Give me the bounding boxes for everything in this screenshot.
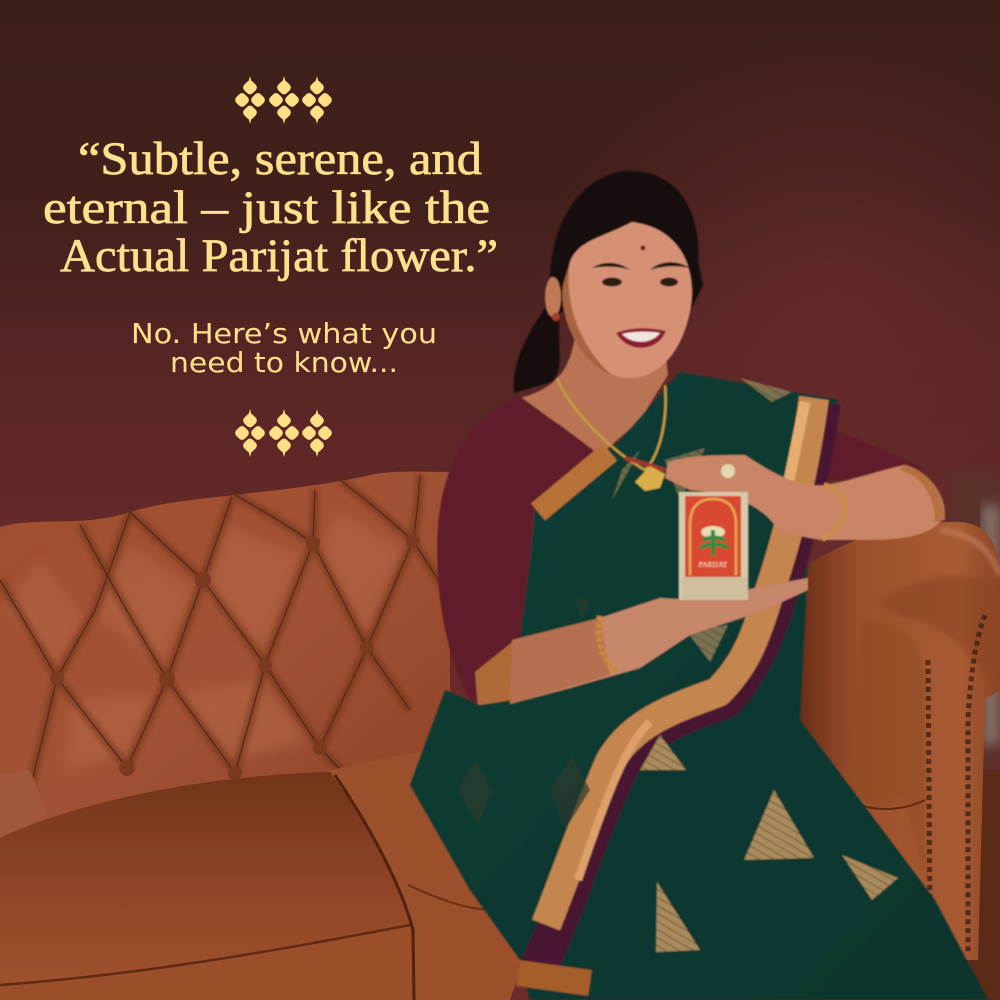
sub text: No. Here’s what you <box>131 317 437 350</box>
saree gold motifs <box>612 378 898 952</box>
quote heading <box>43 133 498 282</box>
tuft highlights <box>5 510 405 770</box>
ring <box>721 464 735 478</box>
leather sofa <box>0 472 1000 1000</box>
sub text: need to know... <box>170 346 398 379</box>
bracelet <box>822 485 845 540</box>
saree gold border <box>518 398 822 983</box>
lower arm and hand <box>510 578 808 704</box>
right sofa arm <box>800 522 1000 960</box>
left seat cushion <box>0 772 414 1000</box>
quote heading: “Subtle, serene, and <box>78 133 482 185</box>
top ornament <box>234 76 333 124</box>
right seat cushion <box>320 752 535 1000</box>
gold bangle <box>599 616 617 673</box>
box label: PARIJAT <box>699 560 728 569</box>
quote heading: Actual Parijat flower.” <box>60 230 498 282</box>
green saree <box>410 372 988 1000</box>
woman in green saree holding product <box>410 171 988 1000</box>
studs <box>928 615 985 955</box>
product box <box>679 492 748 600</box>
box flower <box>700 526 728 556</box>
tuft shadow <box>0 475 445 790</box>
sofa back with tufting <box>0 472 450 850</box>
neck and chest <box>520 335 668 455</box>
maroon blouse <box>437 397 925 708</box>
face <box>545 222 692 378</box>
sub text <box>131 317 437 379</box>
hair and ponytail <box>514 171 703 393</box>
necklace and pendant <box>557 378 666 491</box>
bottom ornament <box>234 409 333 457</box>
box arch <box>690 499 736 575</box>
upper arm and hand <box>665 455 945 540</box>
quote heading: eternal – just like the <box>43 182 490 234</box>
